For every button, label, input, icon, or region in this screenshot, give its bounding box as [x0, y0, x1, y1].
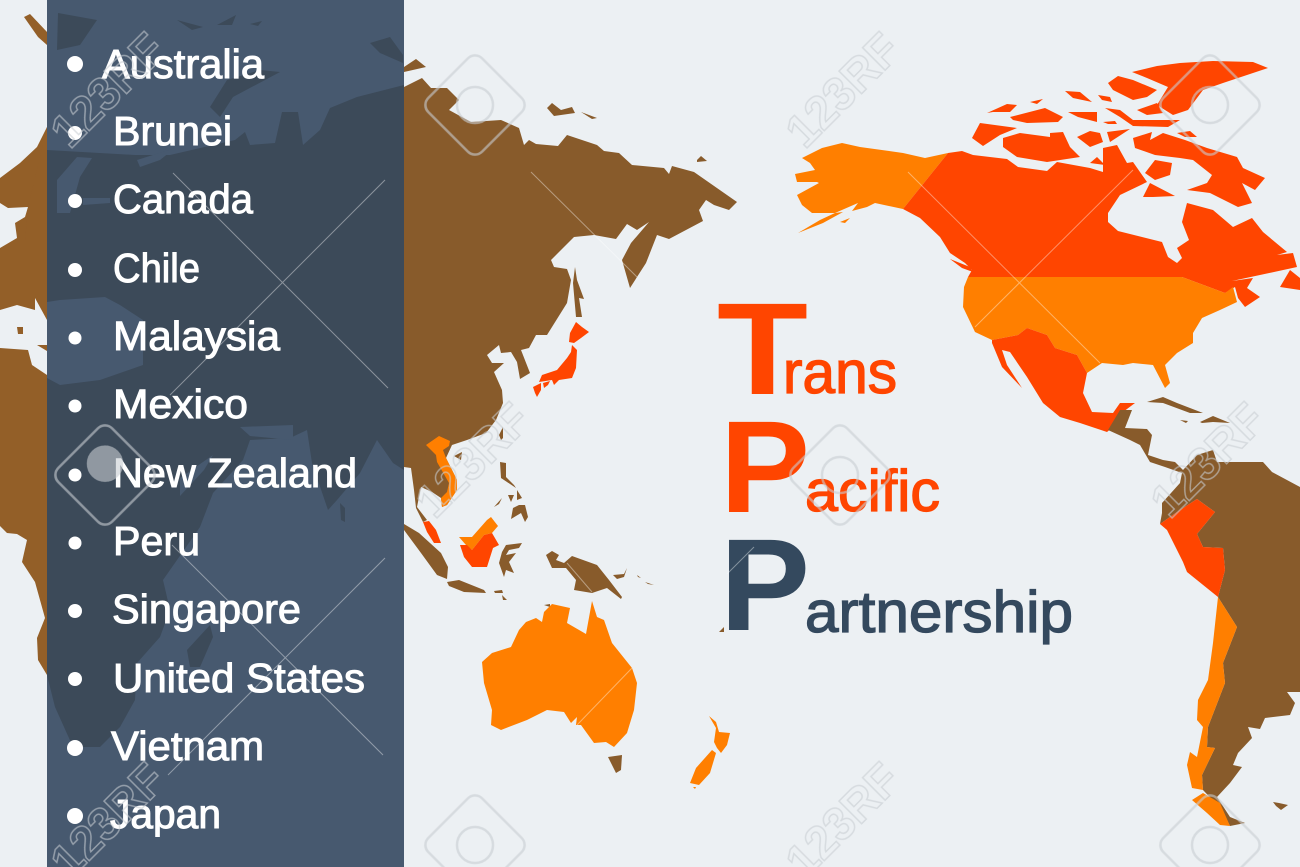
watermark labels: 123RF [1140, 393, 1275, 527]
list item: Japan: Japan [110, 791, 221, 837]
list item: Mexico: Mexico [113, 381, 248, 427]
land: Vietnam [426, 436, 457, 507]
title line: Trans: rans [783, 339, 897, 406]
land: Canada [903, 61, 1300, 307]
list item: Singapore: Singapore [112, 586, 301, 632]
list item: Vietnam: Vietnam [111, 723, 264, 769]
watermark labels: 123RF [405, 393, 540, 527]
title line: Partnership: artnership [805, 580, 1073, 645]
list item: Brunei: Brunei [113, 108, 232, 154]
land: Japan [533, 322, 589, 397]
title line: Pacific [720, 393, 940, 540]
watermark overlay [168, 170, 1133, 775]
title line: Partnership [720, 511, 1073, 658]
title line: Pacific: P [720, 393, 810, 540]
land: Alaska [795, 143, 948, 233]
list item: Chile [68, 245, 200, 291]
land: Malaysia peninsula [423, 521, 441, 543]
land: Central and South America [1108, 397, 1300, 826]
title: Trans Pacific Partnership [717, 275, 1073, 658]
list item: Chile: Chile [113, 245, 200, 291]
land: Malaysia Borneo [460, 533, 499, 567]
title line: Pacific: acific [805, 459, 940, 524]
list item: Peru: Peru [113, 518, 200, 564]
list item: Malaysia: Malaysia [113, 313, 280, 359]
list item: New Zealand: New Zealand [113, 450, 357, 496]
panel sea patches [47, 148, 293, 496]
watermark labels: 123RF [775, 23, 910, 157]
list item: United States: United States [113, 655, 365, 701]
land: Peru [1160, 499, 1225, 597]
panel map silhouette [47, 13, 404, 747]
land: Brunei [459, 517, 498, 550]
land: Asia [404, 59, 737, 773]
title line: Partnership: P [720, 511, 810, 658]
land: United States [963, 277, 1237, 388]
watermark labels: 123RF [40, 23, 175, 157]
list item: Peru [68, 518, 200, 564]
title line: Trans [717, 275, 897, 422]
list item: Australia: Australia [102, 41, 264, 87]
panel: country list [47, 0, 404, 867]
land: Chile [1187, 597, 1237, 826]
land: New Zealand [690, 716, 730, 789]
list item: Canada: Canada [113, 176, 253, 222]
land: Mexico [992, 328, 1135, 432]
land: Australia [482, 601, 637, 747]
title line: Trans: T [717, 275, 808, 422]
land: Europe and Africa left of panel [0, 14, 47, 675]
